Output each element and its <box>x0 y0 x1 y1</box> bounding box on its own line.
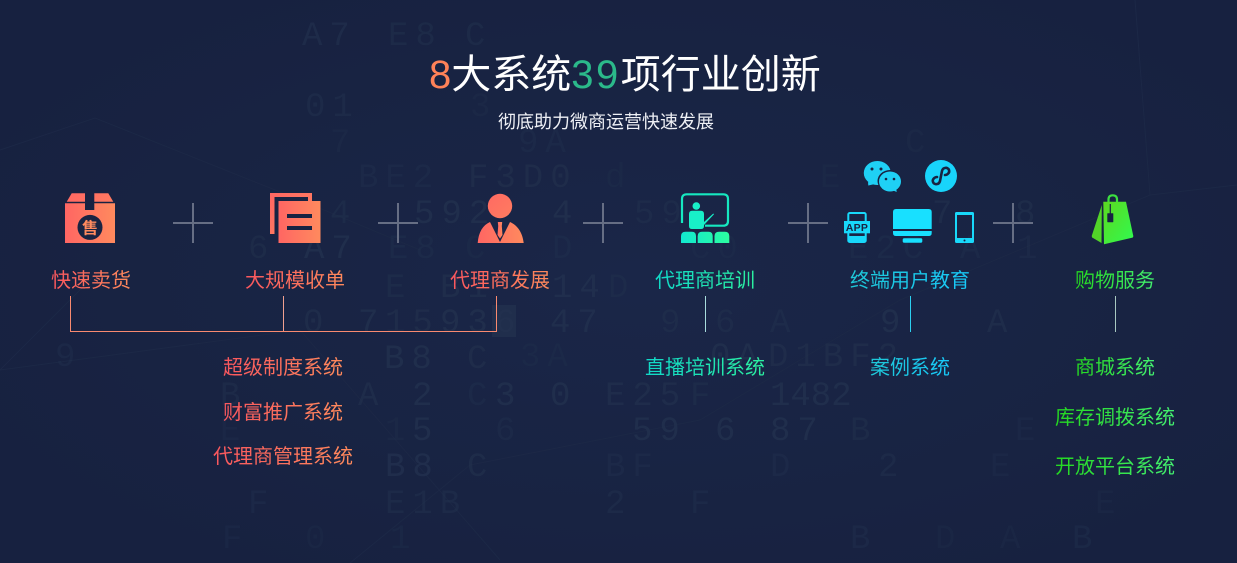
text: 59 <box>634 196 689 234</box>
text: E <box>1015 413 1042 451</box>
text: 0A <box>710 339 765 377</box>
icon: box: 售 <box>82 218 98 238</box>
text: A <box>1000 521 1027 559</box>
text: 6 <box>248 231 275 269</box>
text: 15 <box>385 305 440 343</box>
text: D <box>935 521 962 559</box>
label: 代理商发展: 代理商发展 <box>450 270 550 292</box>
item: 代理商管理系统: 代理商管理系统 <box>213 446 353 468</box>
text: 6 <box>715 413 742 451</box>
text: 47 <box>550 305 605 343</box>
text: A <box>770 305 797 343</box>
text: 4 <box>552 196 579 234</box>
text: 1 <box>385 413 412 451</box>
text: E <box>820 160 847 198</box>
icon: app phone: APP <box>846 222 868 234</box>
icon: phone <box>955 212 974 243</box>
text: C <box>467 378 494 416</box>
text: 1 <box>390 521 417 559</box>
text: A <box>987 305 1014 343</box>
text: C <box>905 125 932 163</box>
text: 3 <box>470 89 497 127</box>
item: 商城系统: 商城系统 <box>1075 357 1155 379</box>
subtitle: 彻底助力微商运营快速发展 <box>498 112 714 132</box>
text: 2 <box>412 378 439 416</box>
label: 终端用户教育: 终端用户教育 <box>850 270 970 292</box>
text: BE2 <box>358 160 440 198</box>
text: C0 <box>690 231 745 269</box>
plus 1 <box>173 203 213 243</box>
text: C <box>465 18 492 56</box>
plus 5 <box>993 203 1033 243</box>
text: D <box>608 270 635 308</box>
text: 3A <box>520 339 575 377</box>
text: F <box>222 521 249 559</box>
text: A7 <box>304 231 359 269</box>
text: B <box>220 378 247 416</box>
icon: orders <box>270 193 320 243</box>
text: E1B <box>385 486 467 524</box>
text: 2 <box>605 486 632 524</box>
text: C <box>467 449 494 487</box>
text: 0 <box>303 305 330 343</box>
text: 9 <box>660 305 687 343</box>
text: C <box>465 231 492 269</box>
plus 4 <box>788 203 828 243</box>
text: B8 <box>384 341 439 379</box>
text: E <box>990 449 1017 487</box>
text: 6 <box>715 305 742 343</box>
text: 0 <box>305 521 332 559</box>
icon: wechat <box>864 161 902 192</box>
icon: monitor <box>893 209 932 243</box>
text: 0 <box>550 378 577 416</box>
text: 87 <box>770 413 825 451</box>
icon: agent person <box>478 194 524 243</box>
icon: mini program <box>925 160 957 192</box>
label: 快速卖货: 快速卖货 <box>51 270 131 292</box>
text: D1BF2 <box>768 339 905 377</box>
icon: terminal group <box>844 161 932 243</box>
text: 7 <box>358 305 385 343</box>
text: B <box>850 521 877 559</box>
plus 3 <box>583 203 623 243</box>
text: E2C <box>848 231 930 269</box>
text: A <box>358 378 385 416</box>
text: 14 <box>552 270 607 308</box>
connector: 终端 <box>910 296 911 332</box>
text: 9A <box>518 125 573 163</box>
text: 6 <box>495 305 522 343</box>
text: A <box>960 231 987 269</box>
text: E <box>385 270 412 308</box>
plus 2 <box>378 203 418 243</box>
text: E <box>220 413 247 451</box>
text: 9 <box>55 339 82 377</box>
text: d <box>605 160 632 198</box>
icon: shopping bag <box>1092 194 1134 244</box>
text: 93 <box>440 305 495 343</box>
text: A7 <box>302 18 357 56</box>
text: E8 <box>388 231 443 269</box>
label: 代理商培训: 代理商培训 <box>655 270 755 292</box>
item: 开放平台系统: 开放平台系统 <box>1055 456 1175 478</box>
text: B1 <box>440 270 495 308</box>
text: E8 <box>388 18 443 56</box>
text: 2 <box>878 449 905 487</box>
text: BF <box>605 449 660 487</box>
text: E25 <box>605 378 687 416</box>
text: B8 <box>385 449 440 487</box>
text: 4 <box>330 196 357 234</box>
text: B <box>1072 521 1099 559</box>
item: 案例系统: 案例系统 <box>870 357 950 379</box>
text: F3D0 <box>468 160 578 198</box>
item: 财富推广系统: 财富推广系统 <box>223 402 343 424</box>
item: 超级制度系统: 超级制度系统 <box>223 357 343 379</box>
icon: box <box>65 193 115 243</box>
text: 7 <box>932 196 959 234</box>
icon: trainer <box>680 193 730 243</box>
text: 5 <box>412 413 439 451</box>
text: 8 <box>1015 196 1042 234</box>
text: D <box>770 449 797 487</box>
text: 01 <box>305 89 360 127</box>
text: 3 <box>495 378 522 416</box>
label: 购物服务: 购物服务 <box>1075 270 1155 292</box>
text: D <box>552 231 579 269</box>
connector: 购物 <box>1115 296 1116 332</box>
text: F <box>690 486 717 524</box>
text: 592 <box>414 196 496 234</box>
connector: 培训 <box>705 296 706 332</box>
text: C <box>467 341 494 379</box>
text: B <box>850 413 877 451</box>
text: F <box>248 486 275 524</box>
text: E <box>1095 486 1122 524</box>
text: 1 <box>1017 231 1044 269</box>
text: 9 <box>880 305 907 343</box>
item: 库存调拨系统: 库存调拨系统 <box>1055 407 1175 429</box>
text: 7 <box>330 125 357 163</box>
title: 8大系统39项行业创新 <box>429 53 821 97</box>
item: 直播培训系统: 直播培训系统 <box>645 357 765 379</box>
label: 大规模收单: 大规模收单 <box>245 270 345 292</box>
text: 6 <box>495 413 522 451</box>
text: 1482 <box>770 378 852 416</box>
text: F <box>690 378 717 416</box>
bracket: red connector <box>70 296 497 332</box>
text: 59 <box>632 413 687 451</box>
